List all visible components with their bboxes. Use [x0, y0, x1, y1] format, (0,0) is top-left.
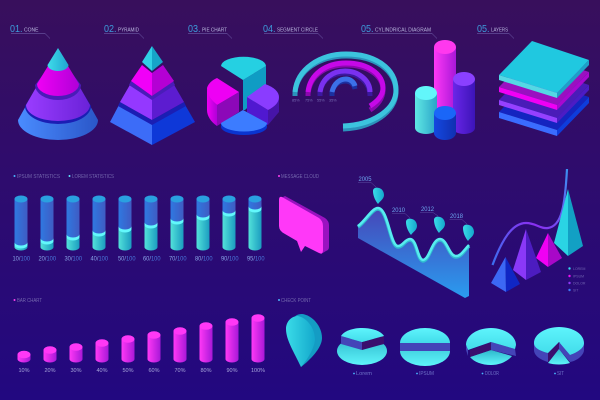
- gauge: 30/100: [66, 196, 80, 251]
- ring: 55%: [320, 71, 370, 96]
- heading: 01 cone: 01.: [10, 23, 22, 35]
- pyramid legend: IPSUM: [573, 274, 584, 278]
- ring labels: [292, 98, 337, 102]
- pyramid chart: [110, 46, 195, 145]
- pin: 2018: 2018: [450, 213, 463, 220]
- bar: 100%: [252, 314, 264, 363]
- trend curve with pyramids: [491, 169, 586, 292]
- ring: 75%: [308, 63, 383, 110]
- cylindrical diagram: [415, 40, 475, 140]
- bar: 10%: [18, 351, 30, 363]
- disk: lorem: Lorem: [356, 371, 372, 377]
- heading: 05 cylindrical diagram: CYLINDRICAL DIAGRAM: [375, 28, 431, 34]
- gauge: 40/100: [92, 196, 106, 251]
- message cloud icon: [279, 196, 329, 254]
- pin: 2010: 2010: [392, 207, 405, 214]
- legend: statistics: IPSUM STATISTICS: [17, 174, 60, 180]
- gauge: 80/100: [196, 196, 210, 251]
- pyramid: magenta: [536, 233, 562, 267]
- check point pin: [286, 314, 322, 367]
- cylinder: magenta: [434, 40, 456, 110]
- gauge labels: 60/100: [143, 256, 161, 262]
- legend: message cloud: MESSAGE CLOUD: [281, 174, 319, 180]
- bar labels: 90%: [226, 368, 238, 374]
- gauge labels: [12, 256, 265, 262]
- bar: 80%: [200, 322, 212, 363]
- bar: 50%: [122, 335, 134, 363]
- cylinder: blue: [434, 106, 456, 140]
- layer: magenta: [499, 53, 589, 110]
- ring: 85%: [295, 54, 396, 129]
- ring labels: 35%: [329, 98, 337, 102]
- disk: sit: [534, 327, 584, 377]
- gauge: 95/100: [248, 196, 262, 251]
- heading: 05 layers: 05.: [477, 23, 490, 35]
- bar labels: 50%: [122, 368, 134, 374]
- gauge labels: 40/100: [90, 256, 109, 262]
- heading: 02 pyramid: PYRAMID: [118, 28, 139, 34]
- heading: 05 layers: LAYERS: [491, 28, 508, 34]
- disk: lorem: [337, 328, 387, 377]
- legend: bar chart: [14, 298, 42, 304]
- bar: 20%: [44, 346, 57, 363]
- heading: 05 cylindrical diagram: 05.: [361, 23, 374, 35]
- area chart: [358, 176, 474, 298]
- bar: 40%: [96, 339, 108, 363]
- bar chart: [18, 314, 265, 374]
- pin: 2012: 2012: [421, 206, 434, 213]
- gauge: 70/100: [170, 196, 184, 251]
- disk: sit: SIT: [557, 371, 564, 377]
- heading: 05 layers: [477, 23, 514, 38]
- gauge: 90/100: [222, 196, 236, 251]
- legend: bar chart: BAR CHART: [17, 298, 42, 304]
- gauge: 60/100: [144, 196, 158, 251]
- pyramid legend: SIT: [573, 288, 579, 292]
- bar labels: 40%: [96, 368, 108, 374]
- bar labels: 100%: [251, 368, 265, 374]
- bar labels: 10%: [18, 368, 30, 374]
- gauge: 10/100: [14, 196, 28, 250]
- bar labels: [18, 368, 265, 374]
- gauge labels: 95/100: [247, 256, 265, 262]
- ring labels: 55%: [317, 98, 325, 102]
- layer: blue: [499, 78, 589, 136]
- heading: 04 segment circle: SEGMENT CIRCLE: [277, 28, 318, 34]
- ring: 35%: [332, 79, 355, 96]
- gauge labels: 50/100: [118, 256, 136, 262]
- gauge: 50/100: [118, 196, 132, 251]
- bar: 70%: [174, 327, 186, 363]
- heading: 01 cone: CONE: [24, 28, 39, 34]
- gauge labels: 30/100: [64, 256, 83, 262]
- pyramid: purple: [513, 229, 541, 280]
- pyramid legend: LOREM: [573, 267, 586, 271]
- gauge cylinders: [12, 196, 265, 262]
- legend: check point: CHECK POINT: [281, 298, 311, 304]
- pin: 2005: 2005: [358, 176, 372, 183]
- legend: statistics: [14, 174, 114, 180]
- pyramid legend: DOLOR: [573, 282, 586, 286]
- heading: 05 cylindrical diagram: [361, 23, 437, 38]
- gauge labels: 20/100: [38, 256, 57, 262]
- bar labels: 30%: [70, 368, 82, 374]
- segment circle chart: [292, 54, 396, 129]
- gauge labels: 80/100: [195, 256, 213, 262]
- layers chart: [499, 41, 589, 136]
- disk: dolor: [466, 328, 516, 377]
- pyramid legend: [568, 267, 586, 292]
- gauge labels: 10/100: [12, 256, 31, 262]
- disk: ipsum: [400, 328, 450, 377]
- bar labels: 60%: [148, 368, 160, 374]
- bar labels: 80%: [200, 368, 212, 374]
- heading: 03 pie chart: PIE CHART: [202, 28, 228, 34]
- cylinder: cyan: [415, 86, 437, 134]
- heading: 01 cone: [10, 23, 50, 38]
- bar: 30%: [70, 343, 82, 363]
- cylinder: purple: [453, 72, 475, 134]
- heading: 04 segment circle: 04.: [263, 23, 276, 35]
- gauge labels: 90/100: [221, 256, 239, 262]
- legend: statistics: LOREM STATISTICS: [72, 174, 114, 180]
- heading: 04 segment circle: [263, 23, 323, 38]
- bar labels: 20%: [44, 368, 56, 374]
- heading: 02 pyramid: [104, 23, 144, 38]
- layer: cyan: [499, 41, 589, 98]
- cone chart: [18, 48, 98, 140]
- heading: 02 pyramid: 02.: [104, 23, 116, 35]
- gauge labels: 70/100: [169, 256, 187, 262]
- pie chart: [207, 57, 279, 135]
- bar labels: 70%: [174, 368, 186, 374]
- heading: 03 pie chart: 03.: [188, 23, 200, 35]
- heading: 03 pie chart: [188, 23, 232, 38]
- pyramid: cyan: [554, 189, 583, 256]
- disk: dolor: DOLOR: [485, 371, 499, 377]
- bar: 60%: [148, 331, 160, 363]
- layer: purple: [499, 66, 589, 123]
- bar: 90%: [226, 318, 238, 363]
- ring labels: 75%: [305, 98, 313, 102]
- gauge: 20/100: [40, 196, 54, 250]
- ring labels: 85%: [292, 98, 300, 102]
- disk: ipsum: IPSUM: [419, 371, 434, 377]
- pyramid: blue: [491, 257, 520, 292]
